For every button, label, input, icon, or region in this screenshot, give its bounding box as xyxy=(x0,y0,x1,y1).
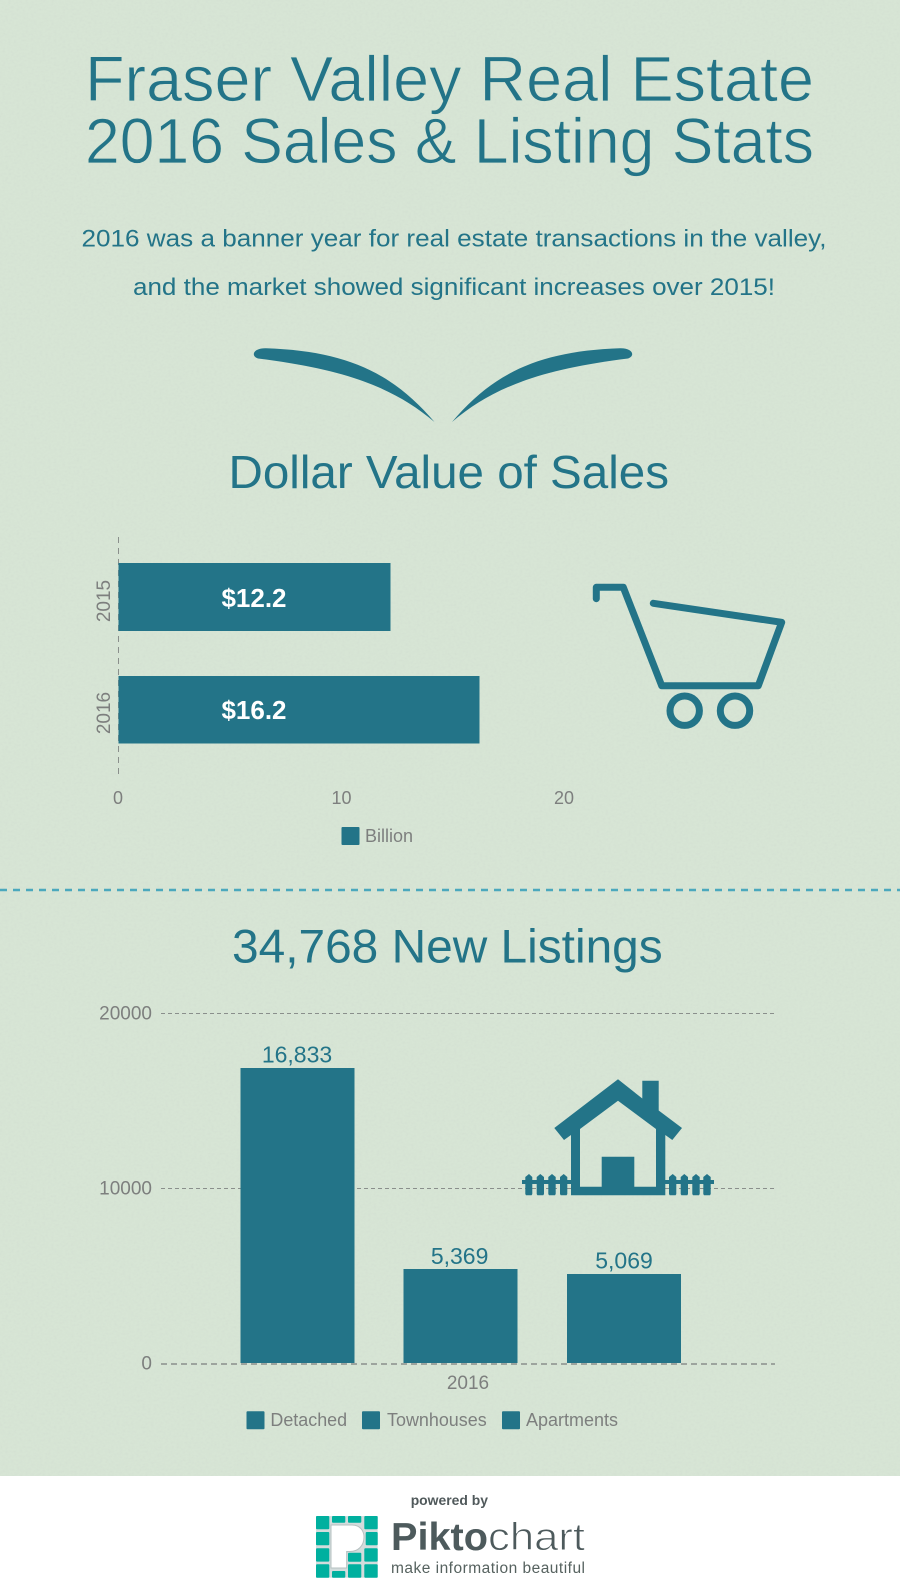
bar: 2015 xyxy=(118,563,390,631)
x axis labels: 0 xyxy=(113,788,123,808)
heading: new listings: 34,768 New Listings xyxy=(232,920,663,973)
bar: townhouses xyxy=(404,1269,518,1363)
y axis labels: 0 xyxy=(141,1354,152,1374)
value: 2016: $16.2 xyxy=(221,695,287,725)
piktochart logo mark xyxy=(316,1516,378,1578)
x axis label: 2016 xyxy=(447,1373,489,1394)
y axis labels: 10000 xyxy=(99,1178,152,1200)
legend: billion: Billion xyxy=(365,826,413,846)
bar: detached xyxy=(240,1068,354,1363)
fence left xyxy=(522,1174,572,1195)
category label: 2016: 2016 xyxy=(94,692,115,734)
intro text: 2016 was a banner year for real estate transactions in the valley, xyxy=(82,226,826,252)
icon: house with fence xyxy=(522,1079,714,1195)
intro text: and the market showed significant increases over 2015! xyxy=(133,274,775,301)
title: Fraser Valley Real Estate xyxy=(85,43,814,115)
icon: shopping cart xyxy=(596,587,782,725)
powered by: powered by xyxy=(411,1492,488,1508)
bar chart: dollar value of sales xyxy=(94,537,574,846)
footer: powered by piktochart: chart xyxy=(488,1516,585,1559)
bar: apartments xyxy=(567,1274,681,1363)
heading: dollar value of sales: Dollar Value of Sales xyxy=(228,446,669,498)
x axis labels xyxy=(113,788,574,808)
bar value labels: 16,833 xyxy=(262,1042,332,1068)
piktochart wordmark: Pikto xyxy=(391,1516,488,1559)
bar chart: new listings xyxy=(99,1004,775,1430)
legend: townhouses: Townhouses xyxy=(387,1410,487,1430)
legend: detached: Detached xyxy=(270,1410,347,1430)
x axis labels: 20 xyxy=(554,788,574,808)
footer: powered by piktochart xyxy=(0,1476,900,1596)
title xyxy=(85,43,814,177)
bar value labels: 5,069 xyxy=(595,1248,653,1274)
bar: 2016 xyxy=(118,676,480,744)
y axis labels: 20000 xyxy=(99,1004,152,1024)
y axis labels xyxy=(99,1004,152,1374)
x axis labels: 10 xyxy=(331,788,352,808)
bar value labels: 5,369 xyxy=(431,1243,488,1269)
bar value labels xyxy=(262,1042,653,1274)
intro text xyxy=(82,226,826,301)
legend: apartments: Apartments xyxy=(526,1410,618,1430)
category label: 2015: 2015 xyxy=(94,580,115,622)
legend: billion xyxy=(342,826,413,846)
title: 2016 Sales & Listing Stats xyxy=(85,105,814,177)
value: 2015: $12.2 xyxy=(221,583,287,613)
tagline: make information beautiful xyxy=(391,1560,585,1577)
decorative swoosh divider xyxy=(254,348,632,422)
fence right xyxy=(664,1174,714,1195)
